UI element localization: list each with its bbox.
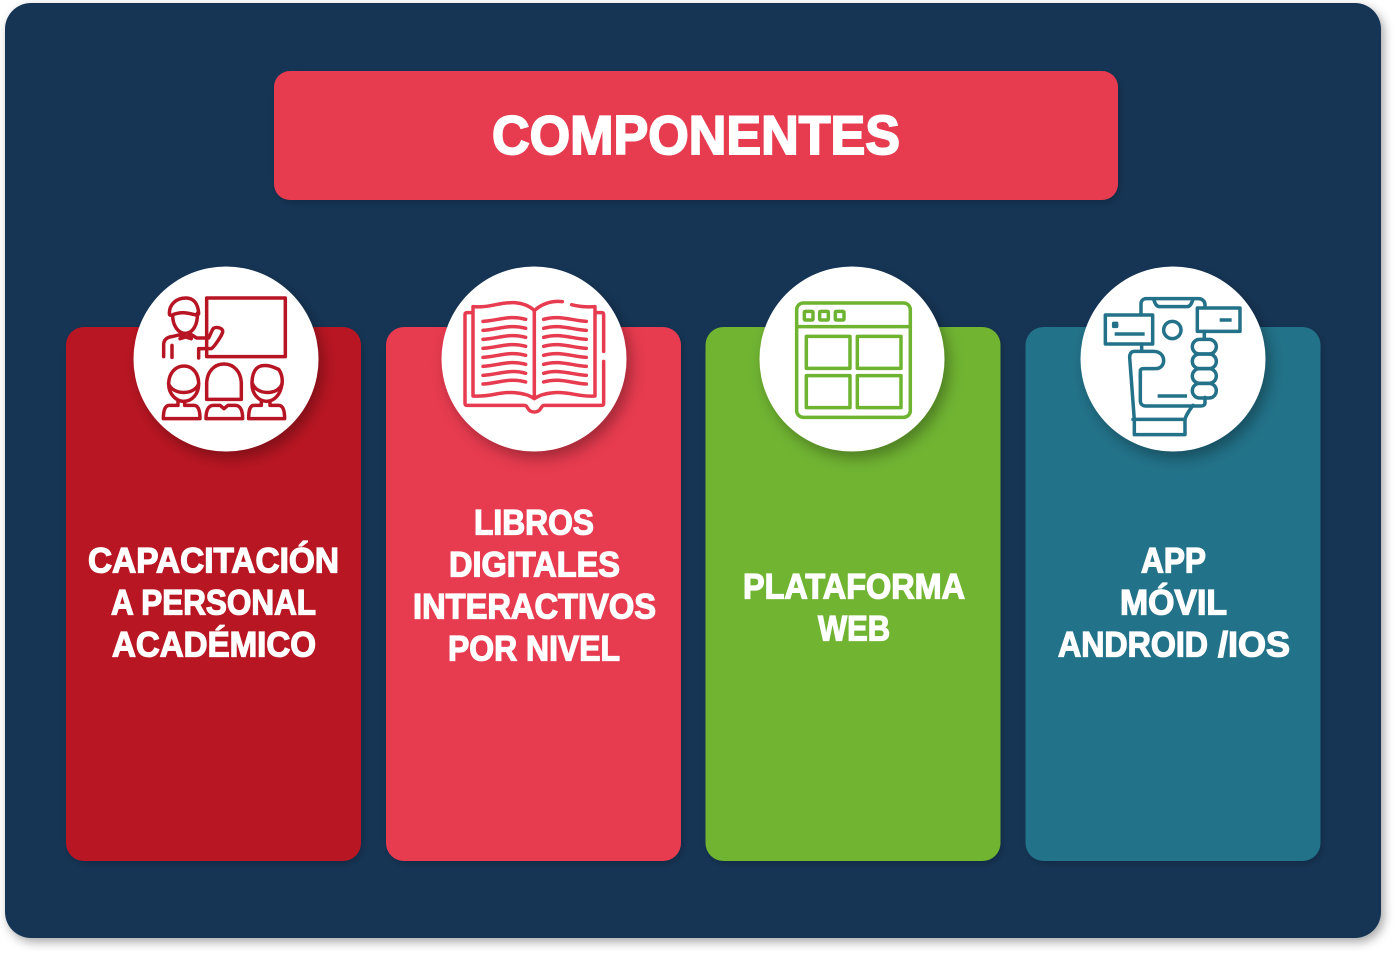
panel: libros digitales: [386, 266, 681, 861]
panel text: POR NIVEL: [448, 630, 620, 668]
title banner: [274, 71, 1118, 200]
panel text: [743, 568, 965, 648]
icon circle: open book: [442, 266, 626, 452]
panel text: [413, 504, 656, 668]
panel text: ACADÉMICO: [112, 624, 316, 664]
panel text: [1058, 542, 1290, 664]
panel: capacitación: [66, 266, 361, 861]
title text: COMPONENTES: [492, 104, 900, 166]
panel text: CAPACITACIÓN: [88, 540, 339, 580]
panel text: INTERACTIVOS: [413, 588, 656, 626]
panel text: ANDROID: [1058, 626, 1208, 664]
icon circle: teacher and students: [134, 266, 318, 452]
panel text: LIBROS: [474, 504, 594, 542]
panel: app móvil: [1026, 266, 1320, 861]
panel text: [88, 540, 339, 664]
panel text: APP: [1141, 542, 1206, 580]
panel text: A PERSONAL: [111, 584, 316, 622]
panel text: /IOS: [1218, 626, 1290, 664]
panel text: PLATAFORMA: [743, 568, 965, 606]
icon circle: web browser window: [760, 266, 944, 452]
panel text: DIGITALES: [449, 546, 620, 584]
panel: plataforma web: [706, 266, 1000, 861]
icon circle: phone in hand: [1080, 266, 1266, 452]
panel text: WEB: [818, 610, 890, 648]
panel text: MÓVIL: [1120, 582, 1227, 622]
